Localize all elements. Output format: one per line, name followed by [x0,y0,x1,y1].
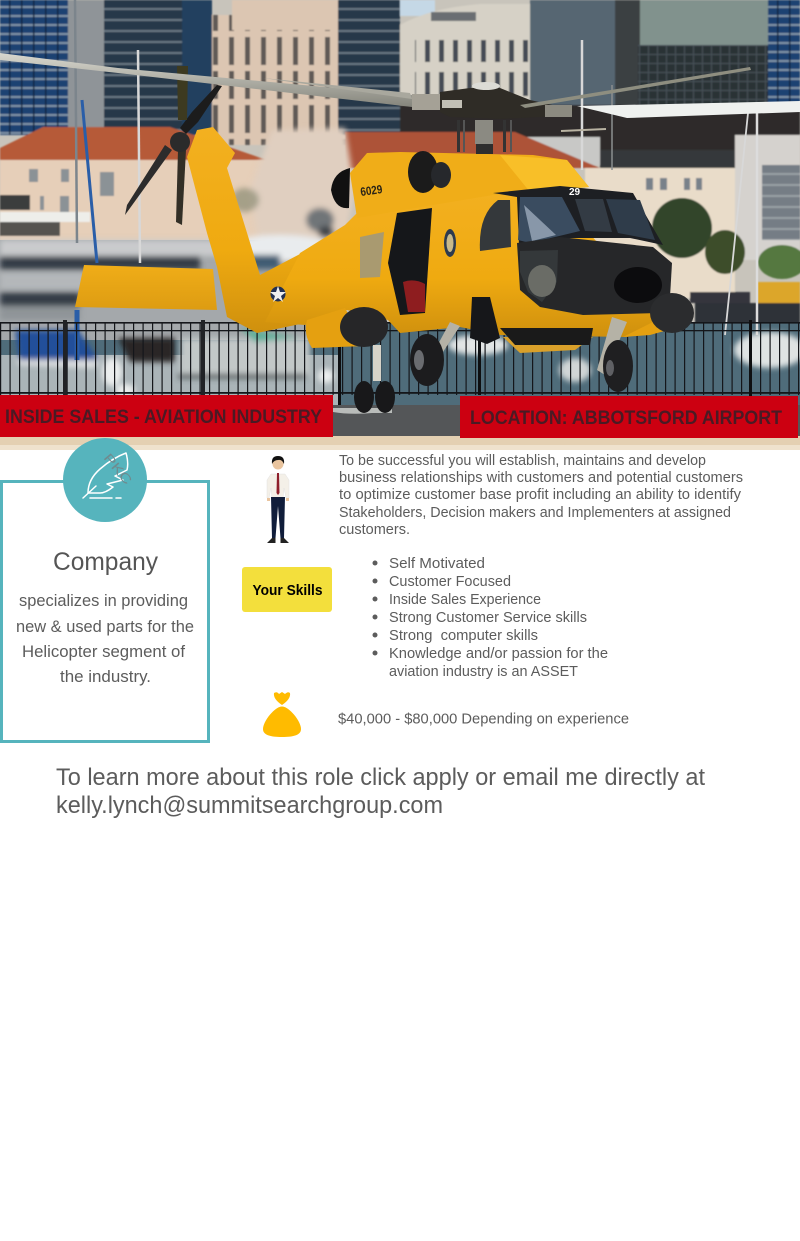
chin window [520,250,558,302]
side window panel [360,232,384,278]
icon: feather quill badge [63,438,147,522]
watermark: PKC [101,450,135,488]
landing gear [354,317,633,413]
side fuel tanks [306,308,365,348]
safety fence [0,320,800,410]
red tile roofs [0,127,267,165]
sailboat masts [75,0,757,360]
palms and trees [652,198,712,258]
main fuselage [265,191,663,337]
engine cowl [350,152,589,218]
banner: job title [0,395,333,437]
role description: customers. [339,522,410,538]
fountain spray [0,128,800,396]
skills list: aviation industry is an ASSET [389,664,578,680]
salary: $40,000 - $80,000 Depending on experience [338,712,629,728]
skills list: Knowledge and/or passion for the [389,646,608,662]
moored boats [15,330,100,362]
role description: To be successful you will establish, maintains and develop [339,453,706,469]
heading: company: Company [53,548,158,576]
role description: to optimize customer base profit including an ability to identify [339,487,742,503]
company description [16,591,194,686]
label: your skills [242,567,332,612]
tail number: 6029 [359,182,383,199]
closing call to action: To learn more about this role click apply or email me directly at [56,764,705,791]
role description: business relationships with customers and potential customers [339,470,743,486]
rotor blades [0,53,412,107]
harbor water [0,322,800,408]
lower belly tank [503,337,593,353]
banner: location: LOCATION: ABBOTSFORD AIRPORT [470,408,782,429]
nose sensor [614,267,662,303]
service emblem [444,229,456,257]
hero photo: yellow helicopter over harbor [0,0,800,450]
company description: the industry. [60,667,151,686]
role description [339,453,743,538]
rotor mast and hub [412,82,575,154]
skills list [372,556,608,680]
cream waterfront buildings [0,160,345,250]
icon: money bag [263,692,301,737]
crew door window [480,200,511,251]
company description: specializes in providing [19,591,188,610]
icon: businessman [267,456,289,543]
black nose [517,237,672,315]
role description: Stakeholders, Decision makers and Implementers at assigned [339,505,731,521]
cabin door opening [388,208,432,315]
helicopter [0,53,800,413]
exhaust hood [331,168,350,208]
banner: job title: INSIDE SALES - AVIATION INDUSTRY [5,407,322,428]
closing call to action: kelly.lynch@summitsearchgroup.com [56,792,443,819]
skills list: Strong Customer Service skills [389,610,587,626]
tail boom and fin [187,127,350,333]
panel: company [2,438,208,742]
skills list: Inside Sales Experience [389,592,541,608]
closing call to action [56,764,705,819]
background city buildings [0,0,800,327]
label: your skills: Your Skills [252,582,322,599]
tarmac and sand strip [0,405,800,437]
national star insignia [270,286,286,302]
skills list: Customer Focused [389,574,511,590]
tail rotor [125,66,222,225]
horizontal stabilizer [75,265,217,310]
company description: Helicopter segment of [22,642,185,661]
cockpit roof number: 29 [569,187,581,198]
skills list: Strong computer skills [389,628,538,644]
banner: location [460,396,798,438]
company description: new & used parts for the [16,617,194,636]
rocket hardpoint [470,297,500,344]
cockpit windows [493,186,663,245]
skills list: Self Motivated [389,556,485,572]
